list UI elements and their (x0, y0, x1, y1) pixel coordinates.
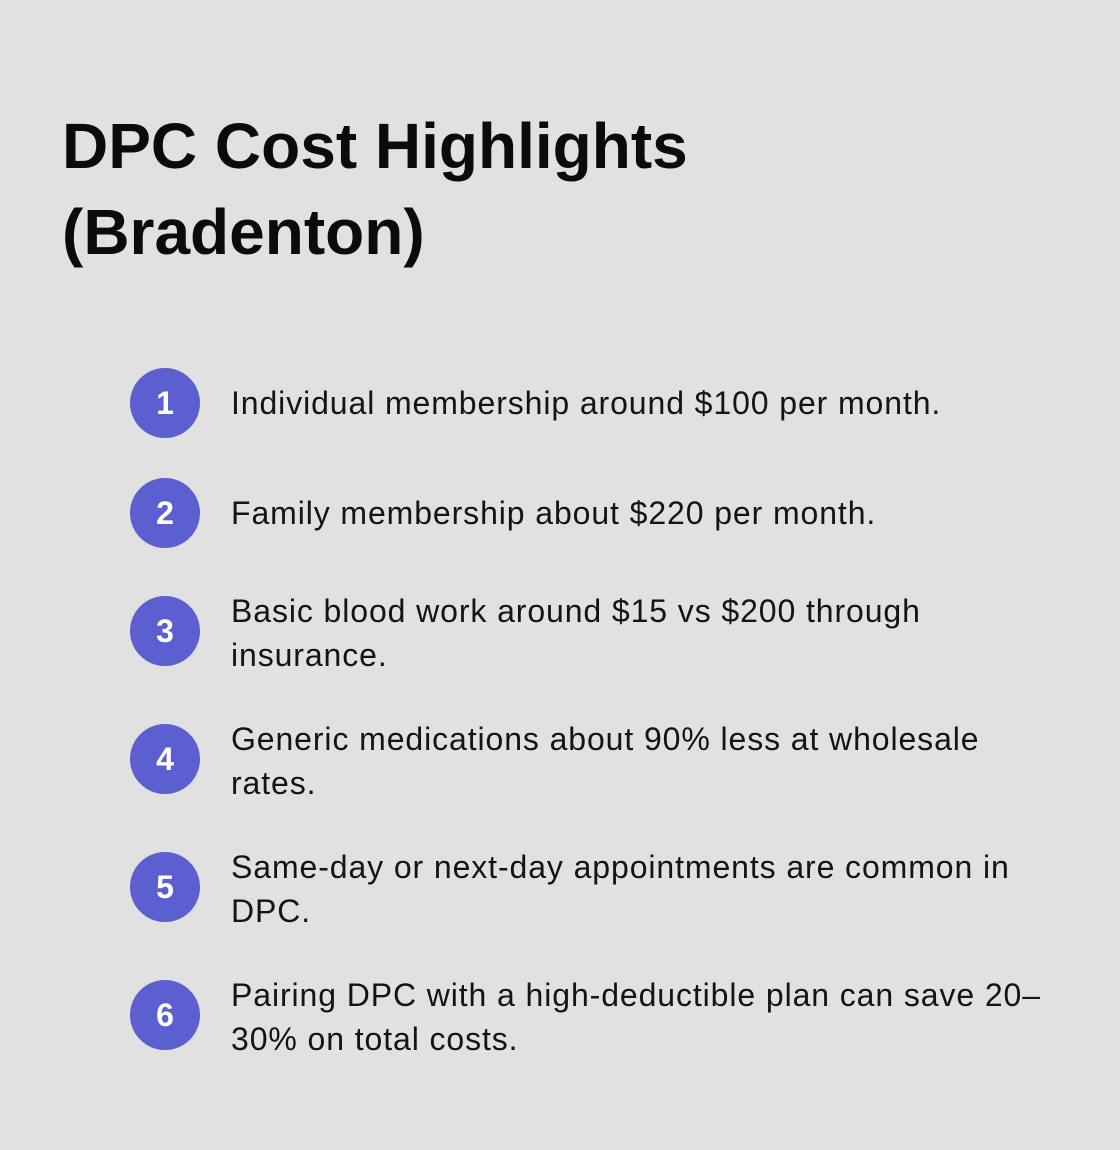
item 1 (130, 368, 941, 438)
icon: number 2 (130, 478, 200, 548)
title: DPC Cost Highlights (62, 110, 688, 182)
icon: number 5 (130, 852, 200, 922)
text 4 (231, 721, 979, 801)
text 3 (231, 593, 921, 673)
icon: number 5: 5 (156, 869, 174, 905)
icon: number 4: 4 (156, 741, 174, 777)
text 3: Basic blood work around $15 vs $200 through (231, 593, 921, 629)
text 4: rates. (231, 765, 316, 801)
text 6: Pairing DPC with a high-deductible plan can save 20– (231, 977, 1041, 1013)
icon: number 3 (130, 596, 200, 666)
icon: number 1 (130, 368, 200, 438)
icon: number 3: 3 (156, 613, 174, 649)
item 3 (130, 593, 921, 673)
title: (Bradenton) (62, 196, 425, 268)
text 5: Same-day or next-day appointments are common in (231, 849, 1010, 885)
text 5: DPC. (231, 893, 311, 929)
title (62, 110, 688, 268)
item 4 (130, 721, 979, 801)
text 2: Family membership about $220 per month. (231, 495, 876, 531)
text 6 (231, 977, 1041, 1057)
text 3: insurance. (231, 637, 388, 673)
icon: number 1: 1 (156, 385, 174, 421)
text 6: 30% on total costs. (231, 1021, 518, 1057)
item 2 (130, 478, 876, 548)
icon: number 4 (130, 724, 200, 794)
item 5 (130, 849, 1010, 929)
text 5 (231, 849, 1010, 929)
icon: number 6 (130, 980, 200, 1050)
text 1: Individual membership around $100 per month. (231, 385, 941, 421)
icon: number 6: 6 (156, 997, 174, 1033)
item 6 (130, 977, 1041, 1057)
text 4: Generic medications about 90% less at wholesale (231, 721, 979, 757)
icon: number 2: 2 (156, 495, 174, 531)
